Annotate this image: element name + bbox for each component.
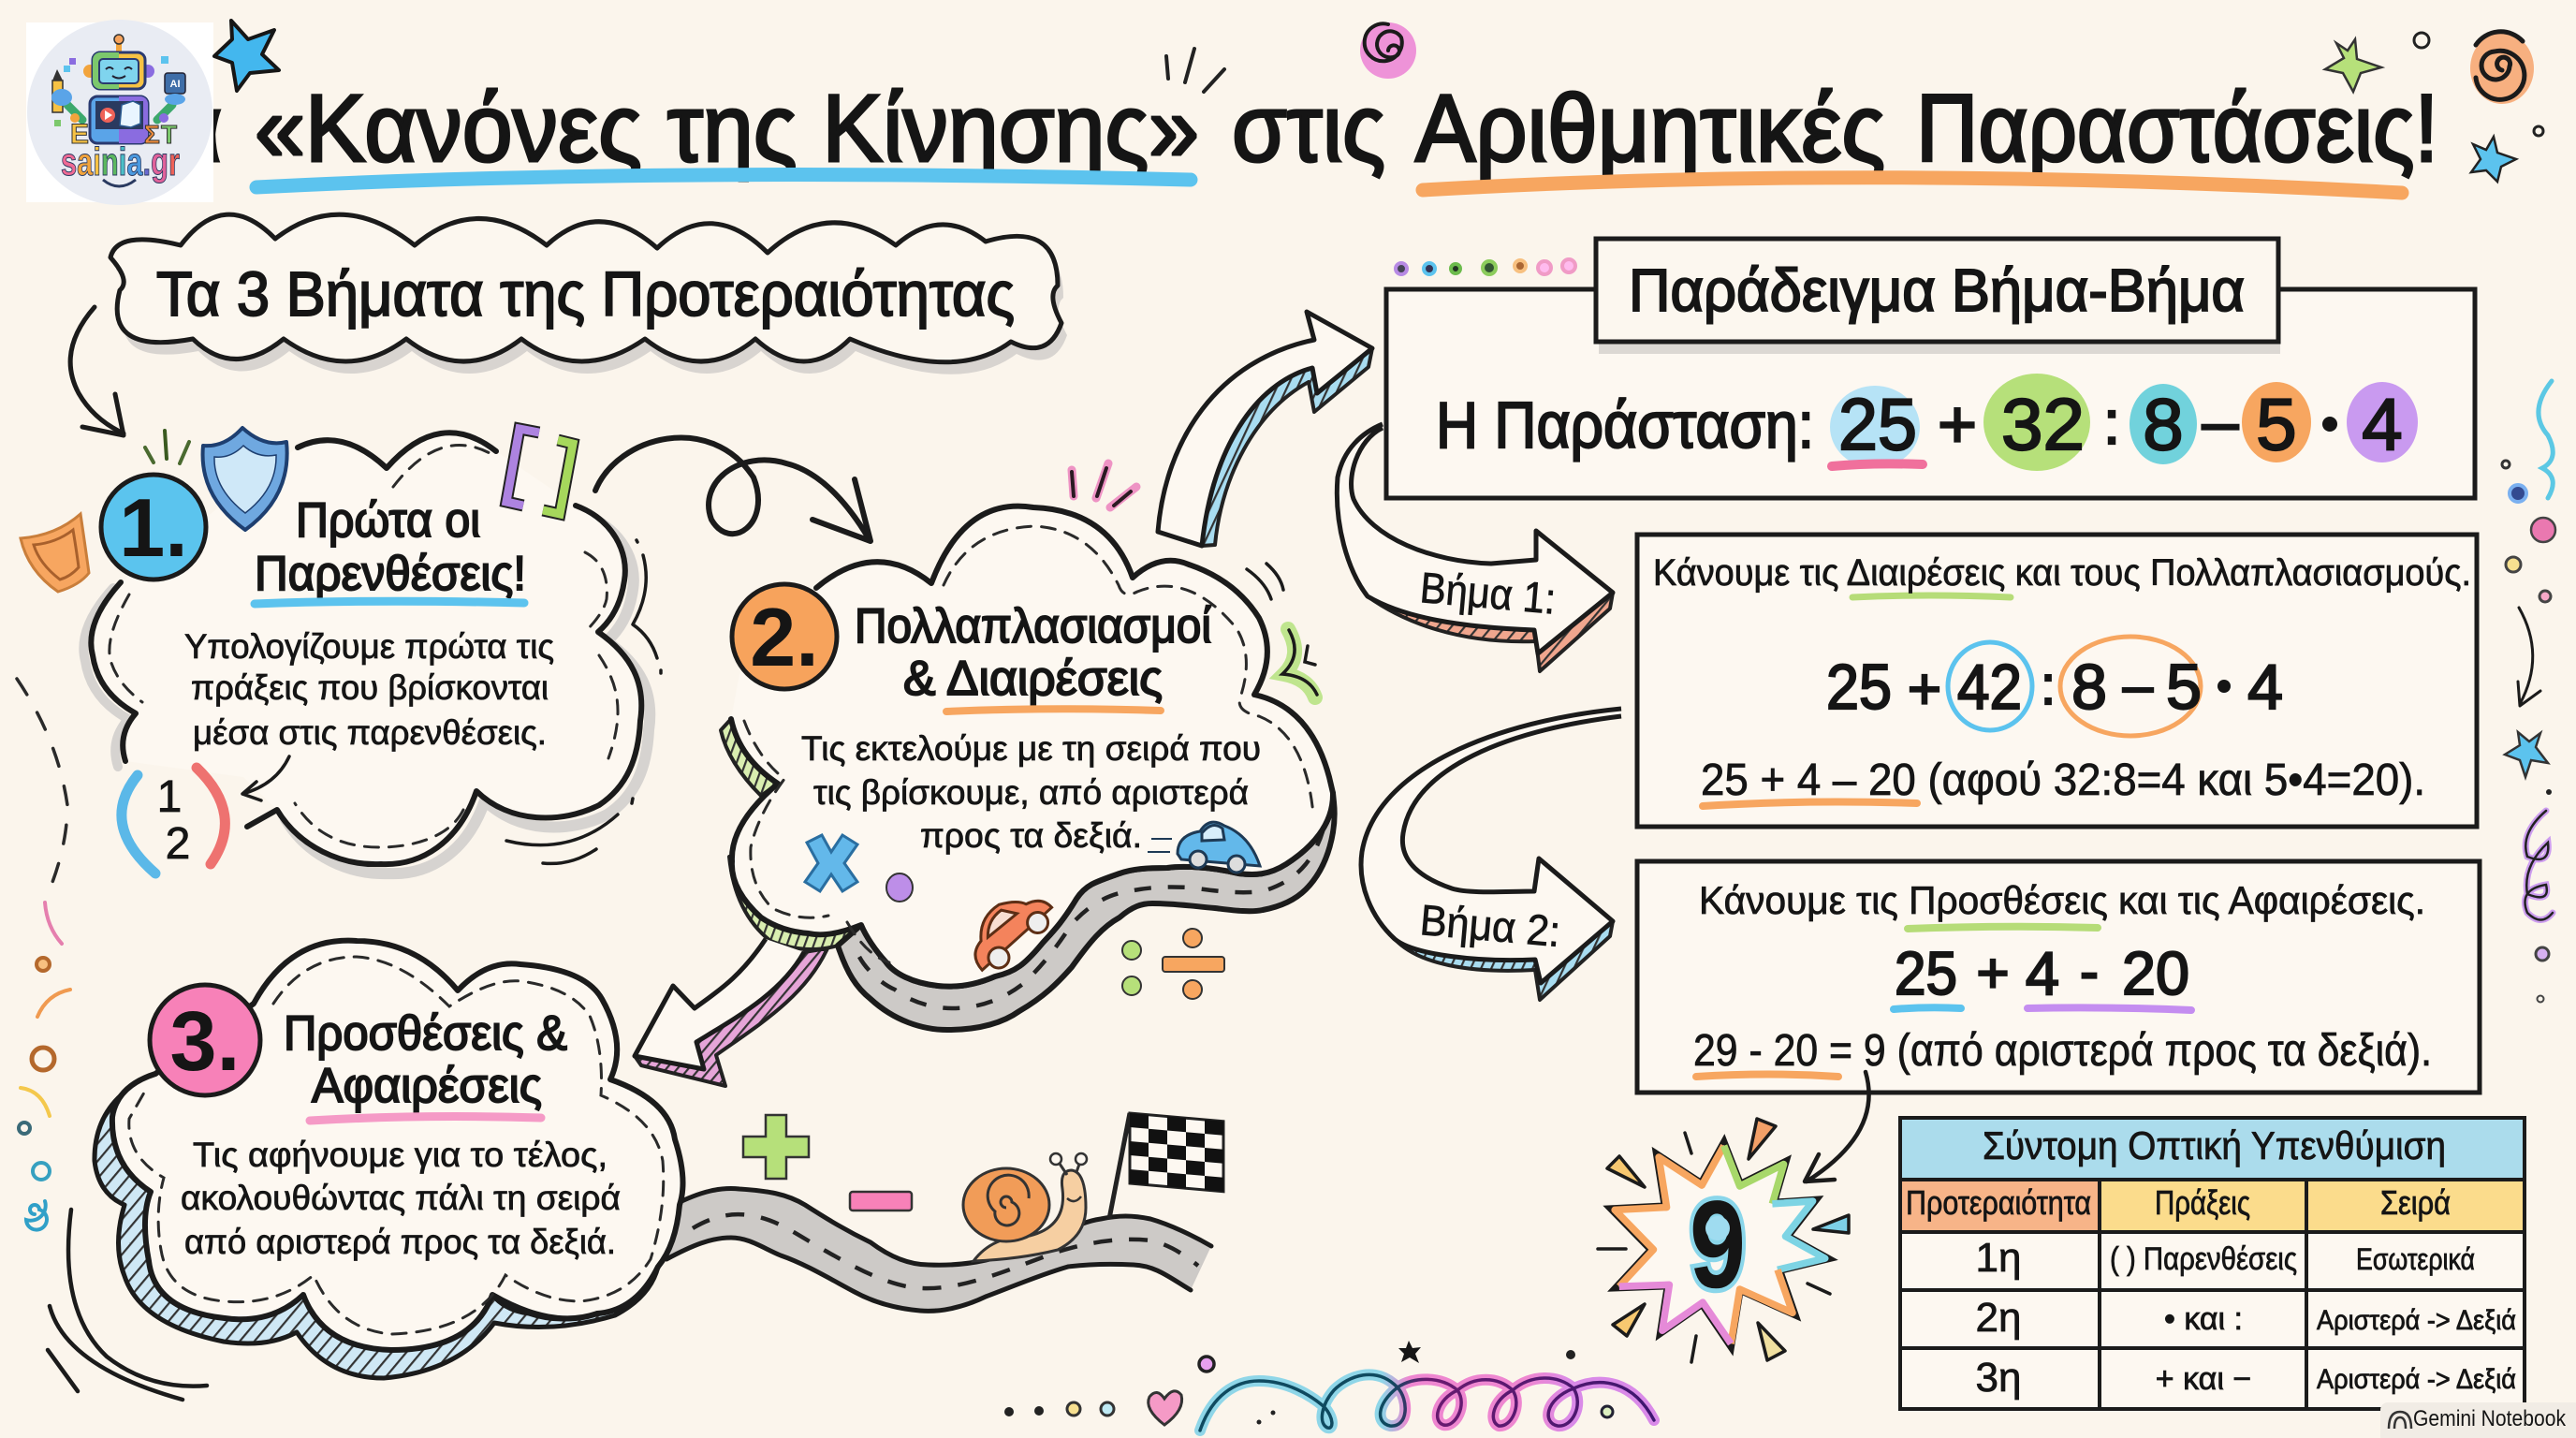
step 2 badge: 2. [750,591,819,683]
logo: sainia.gr: Σ [144,120,160,149]
step 3 heading: Αφαιρέσεις [312,1059,542,1113]
icon: parentheses with 1 and 2: 2 [166,819,190,869]
arrow: step 1 [1337,424,1613,671]
table: quick visual reminder: • και : [2164,1301,2243,1337]
panel: step 2 of example: Κάνουμε τις Προσθέσεις και τις Αφαιρέσεις. [1699,878,2425,922]
arrow right edge [2518,608,2540,706]
logo: sainia.gr: Ε [70,119,89,150]
arrow: step 2 to step 3 [635,939,827,1086]
marked expression: 5 [2166,652,2202,723]
marked expression: – [2123,655,2154,716]
step 1 heading: Πρώτα οι [296,493,480,548]
bottom star and dots [1256,1341,1613,1425]
step 3 text: ακολουθώντας πάλι τη σειρά [181,1179,621,1217]
result starburst: 9 [1608,1139,1832,1350]
panel: step 1 bubble [83,433,650,873]
step 2 text: Τις εκτελούμε με τη σειρά που [801,729,1261,768]
table: quick visual reminder: Προτεραιότητα [1906,1183,2091,1222]
cloud heading: steps of precedence: Τα 3 Βήματα της Προτεραιότητας [156,259,1015,330]
step 1 badge [101,475,206,580]
coil scribble bottom [1200,1374,1654,1431]
table: quick visual reminder: 3η [1976,1355,2021,1401]
dashed swoosh left [17,679,67,885]
expression label: Η Παράσταση: [1436,389,1814,462]
icon: blue star right [2471,137,2516,182]
cloud heading: steps of precedence [110,214,1067,374]
road under bubble 2 [838,793,1335,1030]
colored expression: 5 [2256,383,2297,465]
addition expression: - [2080,940,2099,1003]
marked expression: 8 [2071,652,2107,723]
step 1 text: Υπολογίζουμε πρώτα τις [184,627,554,666]
panel: step 2 bubble [731,506,1333,987]
emphasis ticks over badge 1 [145,431,189,463]
table: quick visual reminder [1900,1118,2525,1409]
title: «Κανόνες της Κίνησης» [255,75,1199,182]
arrow: step 2: Βήμα 2: [1418,895,1562,956]
result starburst: 9: 9 [1690,1176,1746,1314]
title [178,75,2438,193]
starburst rays [1598,1119,1849,1362]
step 2 heading [855,599,1211,712]
title: Παραστάσεις! [1916,75,2438,182]
icon: small ring right [2534,126,2543,136]
step 3 heading [284,1006,567,1121]
addition expression: + [1976,942,2010,1005]
arrow: steps to example [1158,312,1372,546]
logo: sainia.gr [26,20,213,205]
colored expression: + [1938,388,1977,462]
marked expression [1826,637,2283,736]
icon: blue star top [214,21,279,91]
final line: 29 - 20 = 9 (από αριστερά προς τα δεξιά). [1693,1026,2432,1076]
step 1 heading [255,493,526,604]
step 1 badge: 1. [119,481,188,574]
step 1 text: μέσα στις παρενθέσεις. [193,713,547,752]
table: quick visual reminder: ( ) Παρενθέσεις [2110,1241,2297,1277]
step 2 badge [732,584,837,689]
logo: sainia.gr: sainia.gr [61,139,180,183]
arrow: heading to step 1 [70,307,124,435]
icon: heart [1149,1391,1182,1425]
step 1 text: πράξεις που βρίσκονται [191,668,549,707]
icon: snail [963,1153,1087,1261]
title: στις [1232,75,1385,182]
icon: parentheses with 1 and 2 [122,768,225,873]
dots row [1396,259,1575,274]
table: quick visual reminder: Αριστερά -> Δεξιά [2317,1364,2516,1395]
curly arrow: step 1 to step 2 [595,438,871,541]
bottom confetti [1004,1357,1214,1416]
icon: parentheses with 1 and 2: 1 [157,772,182,822]
icon: orange car [957,879,1060,979]
colored expression: – [2203,385,2239,458]
arrow: bubble text to parentheses [242,756,289,800]
arrow: step 1: Βήμα 1: [1418,563,1558,624]
step 3 text [181,1136,621,1261]
step 1 heading: Παρενθέσεις! [255,547,526,601]
title: Αριθμητικές [1415,75,1885,182]
result line: 25 + 4 – 20 (αφού 32:8=4 και 5•4=20). [1701,756,2425,805]
addition expression: 20 [2122,939,2189,1007]
step 1 text [184,627,554,752]
table: quick visual reminder: Εσωτερικά [2356,1242,2475,1276]
icon: blue star lower right [2505,732,2548,777]
addition expression [1894,939,2191,1010]
icon: green star [2325,39,2381,92]
step 3 text: από αριστερά προς τα δεξιά. [184,1223,616,1261]
colored expression [1830,374,2418,471]
motion lines lower left [48,1210,207,1400]
arrow: result to 9 [1805,1072,1869,1181]
step 2 heading: & Διαιρέσεις [903,652,1163,706]
table: quick visual reminder: 2η [1976,1295,2021,1341]
step 2 text: τις βρίσκουμε, από αριστερά [813,773,1249,812]
panel: step 2 of example [1637,861,2480,1093]
icon: square brackets [506,429,573,514]
step 3 badge [150,985,260,1095]
emphasis ticks above title [1166,49,1224,92]
icon: blue multiply sign [805,835,857,891]
right confetti lower [2525,789,2553,1002]
colored expression: : [2103,388,2120,457]
step 2 text [801,729,1261,855]
colored expression: 8 [2143,383,2184,465]
green hatch shadow: bubble 2 [721,719,861,949]
logo: sainia.gr: AI [170,79,180,90]
icon: pink minus [850,1192,912,1211]
example title box [1596,239,2280,354]
icon: small ring [2414,33,2429,48]
marked expression: : [2041,655,2056,716]
panel: step 1 of example: Κάνουμε τις Διαιρέσεις και τους Πολλαπλασιασμούς. [1653,552,2471,594]
motion marks right of step 1 [506,540,661,863]
addition expression: 25 [1895,939,1957,1007]
marked expression: 4 [2247,652,2283,723]
marked expression: 25 [1826,652,1892,723]
step 3 text: Τις αφήνουμε για το τέλος, [193,1136,607,1174]
panel: step 3 bubble [95,941,683,1378]
table: quick visual reminder: + και − [2156,1361,2251,1397]
table: quick visual reminder: Αριστερά -> Δεξιά [2317,1305,2516,1336]
marked expression: + [1908,657,1941,722]
panel: step 1 of example [1637,535,2477,827]
right confetti upper [2502,381,2555,602]
icon: divide signs [1122,929,1224,999]
step 3 heading: Προσθέσεις & [284,1006,567,1061]
panel: worked example [1386,239,2475,498]
icon: green plus [743,1115,809,1179]
icon: blue shield [203,428,287,530]
arrow: step 2 [1361,709,1621,1000]
table: quick visual reminder: 1η [1976,1235,2021,1281]
colored expression: 25 [1838,383,1917,465]
step 3 badge: 3. [169,995,241,1089]
emphasis ticks over bubble 2 [1072,463,1136,507]
road from step 3 to finish [655,1189,1211,1311]
step 2 text: προς τα δεξιά. [920,816,1142,855]
icon: blue car [1148,822,1260,873]
icon: orange spiral [2470,32,2534,104]
badge: Gemini Notebook [2380,1402,2576,1438]
table: quick visual reminder: Πράξεις [2155,1183,2250,1222]
left confetti [19,902,70,1230]
example title box: Παράδειγμα Βήμα-Βήμα [1629,257,2245,324]
title: α [178,75,222,182]
icon: orange shield [21,514,89,592]
logo: sainia.gr: Τ [161,120,177,149]
icon: purple dot [886,873,913,902]
motion lines right of bubble 2 [1247,564,1283,599]
table: quick visual reminder: Σειρά [2380,1183,2451,1222]
marked expression: 42 [1957,652,2022,723]
icon: pink spiral [1360,22,1416,79]
table: quick visual reminder: Σύντομη Οπτική Υπενθύμιση [1983,1123,2446,1167]
step 2 heading: Πολλαπλασιασμοί [855,599,1211,653]
addition expression: 4 [2026,939,2059,1007]
icon: checkered flag [1109,1113,1223,1219]
colored expression: 32 [2001,383,2085,465]
colored expression: 4 [2362,383,2403,465]
green squiggle by bubble 2 [1282,629,1317,697]
